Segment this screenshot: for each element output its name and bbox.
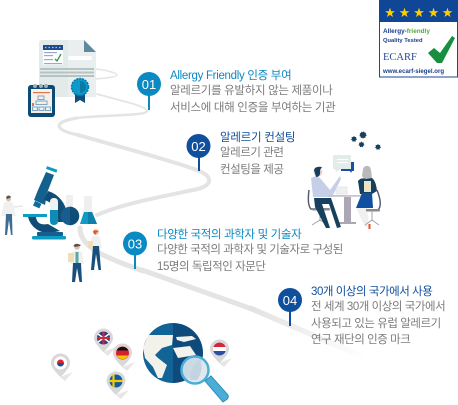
marker 03 bbox=[123, 232, 147, 269]
icon: consulting people bbox=[308, 132, 380, 229]
marker 01: 01 bbox=[142, 77, 156, 92]
step 01 text bbox=[170, 69, 336, 114]
marker 04 bbox=[278, 288, 302, 326]
icon: ECARF seal bbox=[379, 0, 458, 77]
icon: ECARF seal: ECARF bbox=[383, 52, 417, 63]
step 03 description: 15명의 독립적인 자문단 bbox=[157, 260, 266, 272]
icon: ECARF seal: ★ bbox=[414, 7, 425, 19]
icon: flag pin Korea bbox=[51, 354, 73, 381]
step 02 text bbox=[220, 131, 295, 176]
step 01 heading: Allergy Friendly 인증 부여 bbox=[170, 70, 291, 82]
step 03 description bbox=[157, 243, 343, 272]
icon: globe with magnifier bbox=[143, 323, 228, 402]
icon: ECARF seal: Allergy-friendly bbox=[383, 28, 430, 35]
marker 02 bbox=[186, 134, 210, 171]
step 02 description: 알레르기 관련 bbox=[220, 147, 284, 159]
icon: ECARF seal: Quality Tested bbox=[383, 38, 423, 44]
marker 01 bbox=[137, 72, 161, 110]
step 04 description: 전 세계 30개 이상의 국가에서 bbox=[311, 301, 445, 313]
marker 03: 03 bbox=[128, 236, 142, 252]
step 04 description bbox=[311, 300, 445, 346]
icon: flag pin Sweden bbox=[106, 372, 129, 399]
step 04 description: 연구 재단의 인증 마크 bbox=[311, 334, 410, 346]
icon: flag pin Netherlands bbox=[210, 340, 232, 367]
step 01 description bbox=[170, 84, 336, 114]
step 02 description bbox=[220, 146, 284, 176]
winding road bbox=[59, 69, 366, 358]
icon: ECARF seal: ★ bbox=[385, 7, 396, 19]
icon: certificate document bbox=[39, 40, 96, 103]
icon: scientist woman bbox=[88, 229, 102, 270]
step 02 heading: 알레르기 컨설팅 bbox=[220, 132, 295, 144]
step 03 description: 다양한 국적의 과학자 및 기술자로 구성된 bbox=[157, 244, 343, 256]
icon: scientist man bbox=[68, 244, 84, 282]
icon: flag pin UK bbox=[94, 328, 116, 356]
step 03 text bbox=[157, 228, 343, 272]
step 04 description: 사용되고 있는 유럽 알레르기 bbox=[311, 318, 441, 330]
marker 04: 04 bbox=[283, 293, 297, 308]
icon: ECARF seal: ★ bbox=[442, 7, 453, 19]
step 03 heading: 다양한 국적의 과학자 및 기술자 bbox=[157, 229, 301, 241]
step 01 description: 서비스에 대해 인증을 부여하는 기관 bbox=[170, 102, 335, 114]
icon: notepad bbox=[28, 84, 55, 117]
icon: scientist left bbox=[1, 196, 23, 235]
icon: ECARF seal: ★ bbox=[399, 7, 410, 19]
step 04 heading: 30개 이상의 국가에서 사용 bbox=[311, 286, 432, 298]
icon: ECARF seal: ★ bbox=[428, 7, 439, 19]
marker 02: 02 bbox=[191, 139, 206, 154]
icon: flag pin Germany bbox=[113, 344, 135, 371]
icon: microscope and flasks bbox=[23, 166, 97, 240]
step 01 description: 알레르기를 유발하지 않는 제품이나 bbox=[170, 85, 333, 97]
icon: ECARF seal: www.ecarf-siegel.org bbox=[382, 68, 444, 75]
step 02 description: 컨설팅을 제공 bbox=[220, 164, 284, 176]
step 04 text bbox=[311, 285, 445, 346]
